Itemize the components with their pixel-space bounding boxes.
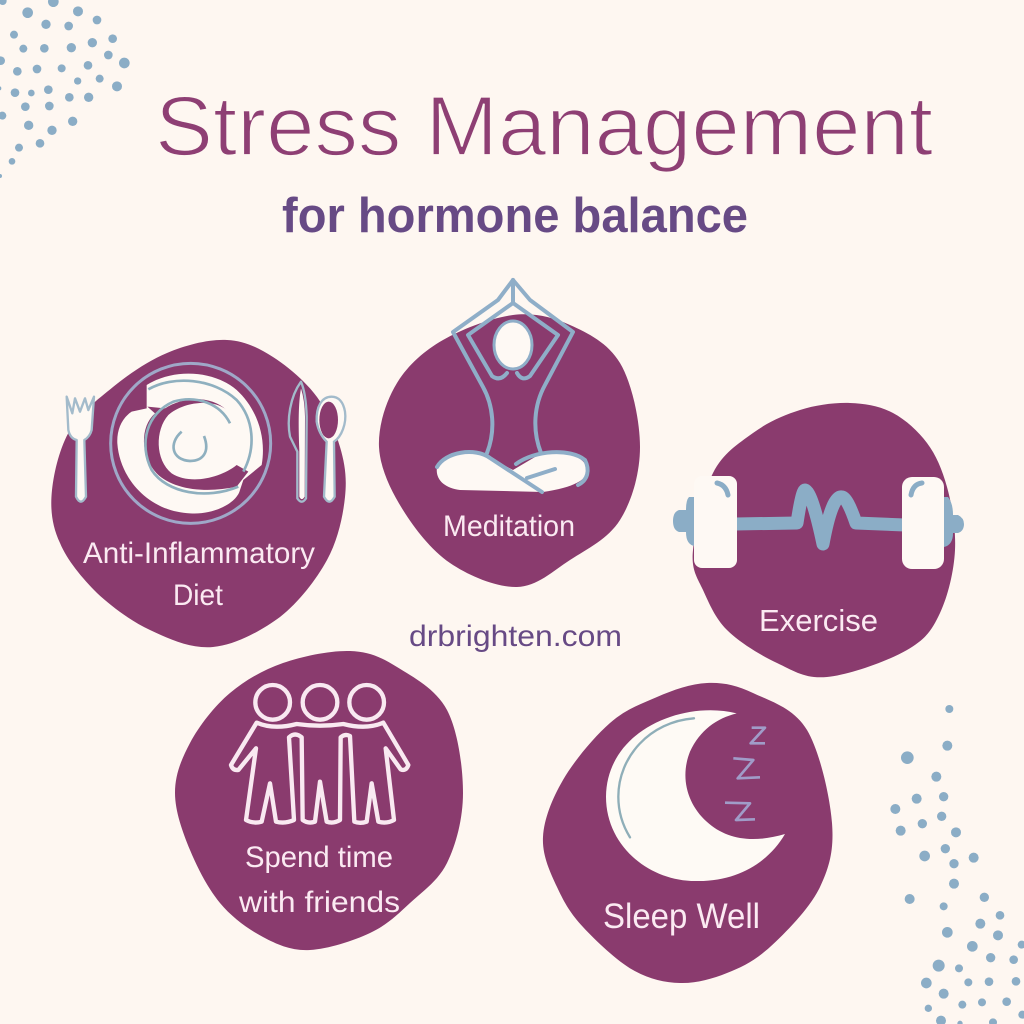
blob background: exercise xyxy=(693,403,955,677)
icon: three friends xyxy=(231,685,408,823)
label: exercise: Exercise xyxy=(759,603,878,638)
icon: plate xyxy=(111,363,271,523)
panel: friends xyxy=(175,651,463,950)
icon: spoon xyxy=(317,397,345,502)
panel: exercise xyxy=(673,403,964,677)
decorative dots: bottom right xyxy=(890,705,1024,1024)
label: diet: Diet xyxy=(173,579,224,612)
decorative dots: top left xyxy=(0,0,130,178)
label: friends: with friends xyxy=(238,886,400,919)
blob background: meditation xyxy=(379,314,640,587)
label: diet xyxy=(83,537,315,612)
label: sleep: Sleep Well xyxy=(603,897,760,936)
website label: drbrighten.com xyxy=(409,620,622,653)
panel: sleep xyxy=(543,683,832,983)
label: friends xyxy=(238,841,400,919)
label: meditation: Meditation xyxy=(443,510,575,543)
panel: anti-inflammatory diet xyxy=(51,340,346,647)
icon: fork xyxy=(67,397,94,502)
icon: crescent moon xyxy=(606,710,785,881)
title: Stress Management xyxy=(155,79,933,173)
blob background: diet xyxy=(51,340,346,647)
label: friends: Spend time xyxy=(245,841,393,874)
label: diet: Anti-Inflammatory xyxy=(83,537,315,570)
icon: barbell with pulse xyxy=(673,476,964,569)
subtitle: for hormone balance xyxy=(282,189,748,243)
icon: knife xyxy=(289,382,307,502)
panel: meditation xyxy=(379,280,640,587)
blob background: friends xyxy=(175,651,463,950)
icon: meditating figure xyxy=(437,280,588,492)
blob background: sleep xyxy=(543,683,832,983)
